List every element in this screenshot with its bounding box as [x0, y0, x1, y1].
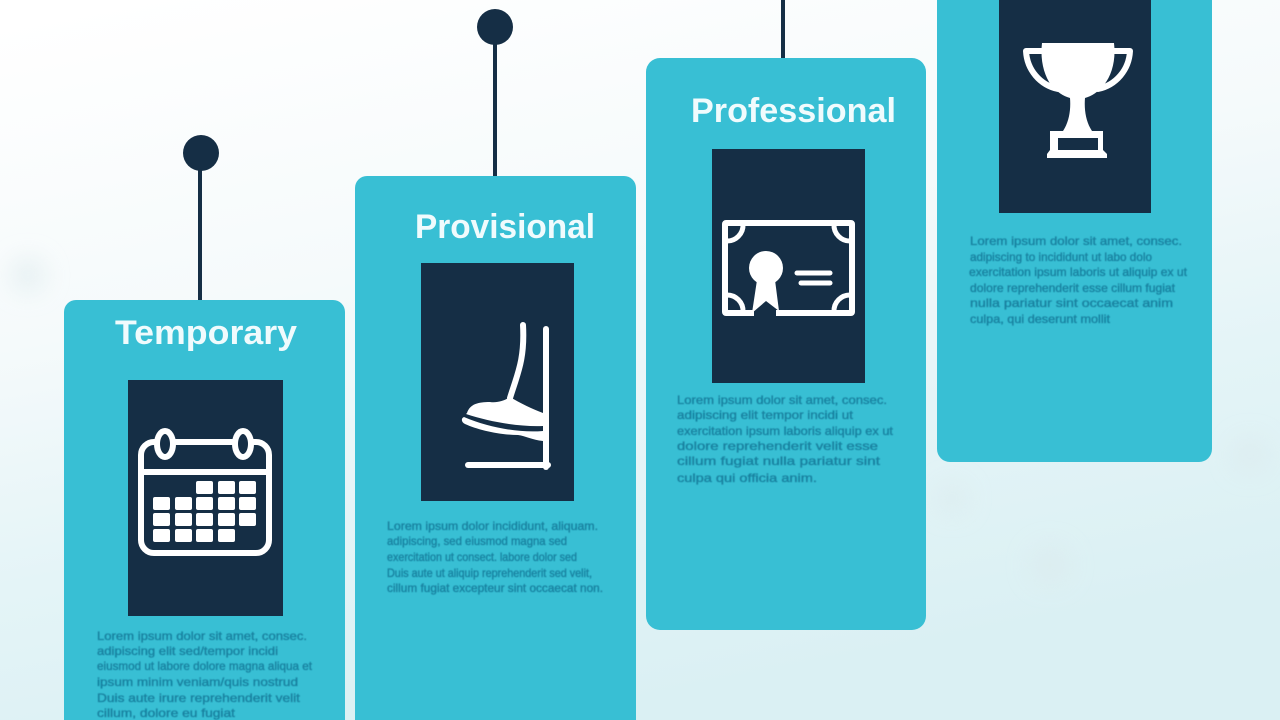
text block: top level description: Lorem ipsum dolor sit amet, consec.: [970, 234, 1182, 248]
text block: Professional description: culpa qui officia anim.: [677, 471, 817, 485]
text block: Professional description: dolore reprehenderit velit esse: [677, 439, 878, 453]
icon tile: certificate: [712, 149, 865, 383]
panel: Temporary: [64, 300, 345, 720]
background haze: [10, 257, 1268, 585]
text block: top level description: [969, 234, 1188, 326]
panel: top level: [937, 0, 1212, 462]
text block: Provisional description: [387, 519, 603, 595]
panel: Provisional: [355, 176, 636, 720]
text block: Temporary description: Lorem ipsum dolor sit amet, consec.: [97, 629, 307, 643]
text block: Professional description: Lorem ipsum dolor sit amet, consec.: [677, 393, 887, 407]
text block: Temporary description: Duis aute irure reprehenderit velit: [97, 691, 301, 705]
text block: Temporary description: cillum, dolore eu fugiat: [97, 706, 236, 720]
connector line: step 3: [781, 0, 785, 60]
heading: Temporary: Temporary: [115, 314, 297, 352]
text block: Provisional description: Lorem ipsum dolor incididunt, aliquam.: [387, 519, 598, 533]
text block: Provisional description: Duis aute ut aliquip reprehenderit sed velit,: [387, 566, 592, 580]
text block: Provisional description: exercitation ut consect. labore dolor sed: [387, 550, 577, 564]
text block: top level description: nulla pariatur sint occaecat anim: [970, 296, 1173, 310]
text block: Temporary description: adipiscing elit sed/tempor incidi: [97, 644, 278, 658]
connector pin: step 1: [183, 135, 219, 302]
text block: top level description: dolore reprehenderit esse cillum fugiat: [970, 281, 1176, 295]
text block: Provisional description: cillum fugiat excepteur sint occaecat non.: [387, 581, 603, 595]
text block: Temporary description: eiusmod ut labore dolore magna aliqua et: [97, 659, 313, 673]
text block: Provisional description: adipiscing, sed eiusmod magna sed: [387, 534, 567, 548]
heading: Professional: Professional: [691, 92, 896, 130]
text block: Professional description: adipiscing elit tempor incidi ut: [677, 408, 854, 422]
icon tile: calendar: [128, 380, 283, 616]
text block: top level description: exercitation ipsum laboris ut aliquip ex ut: [969, 265, 1188, 279]
text block: Professional description: exercitation ipsum laboris aliquip ex ut: [677, 424, 894, 438]
text block: Professional description: [677, 393, 894, 485]
text block: top level description: culpa, qui deserunt mollit: [970, 312, 1111, 326]
text block: top level description: adipiscing to incididunt ut labo dolo: [970, 250, 1152, 264]
heading: Provisional: Provisional: [415, 208, 595, 246]
connector pin: step 2: [477, 9, 513, 178]
icon tile: trophy: [999, 0, 1151, 213]
text block: Professional description: cillum fugiat nulla pariatur sint: [677, 454, 881, 468]
panel: Professional: [646, 58, 926, 630]
icon tile: foot on pedal: [421, 263, 574, 501]
text block: Temporary description: [97, 629, 313, 720]
text block: Temporary description: ipsum minim veniam/quis nostrud: [97, 675, 298, 689]
